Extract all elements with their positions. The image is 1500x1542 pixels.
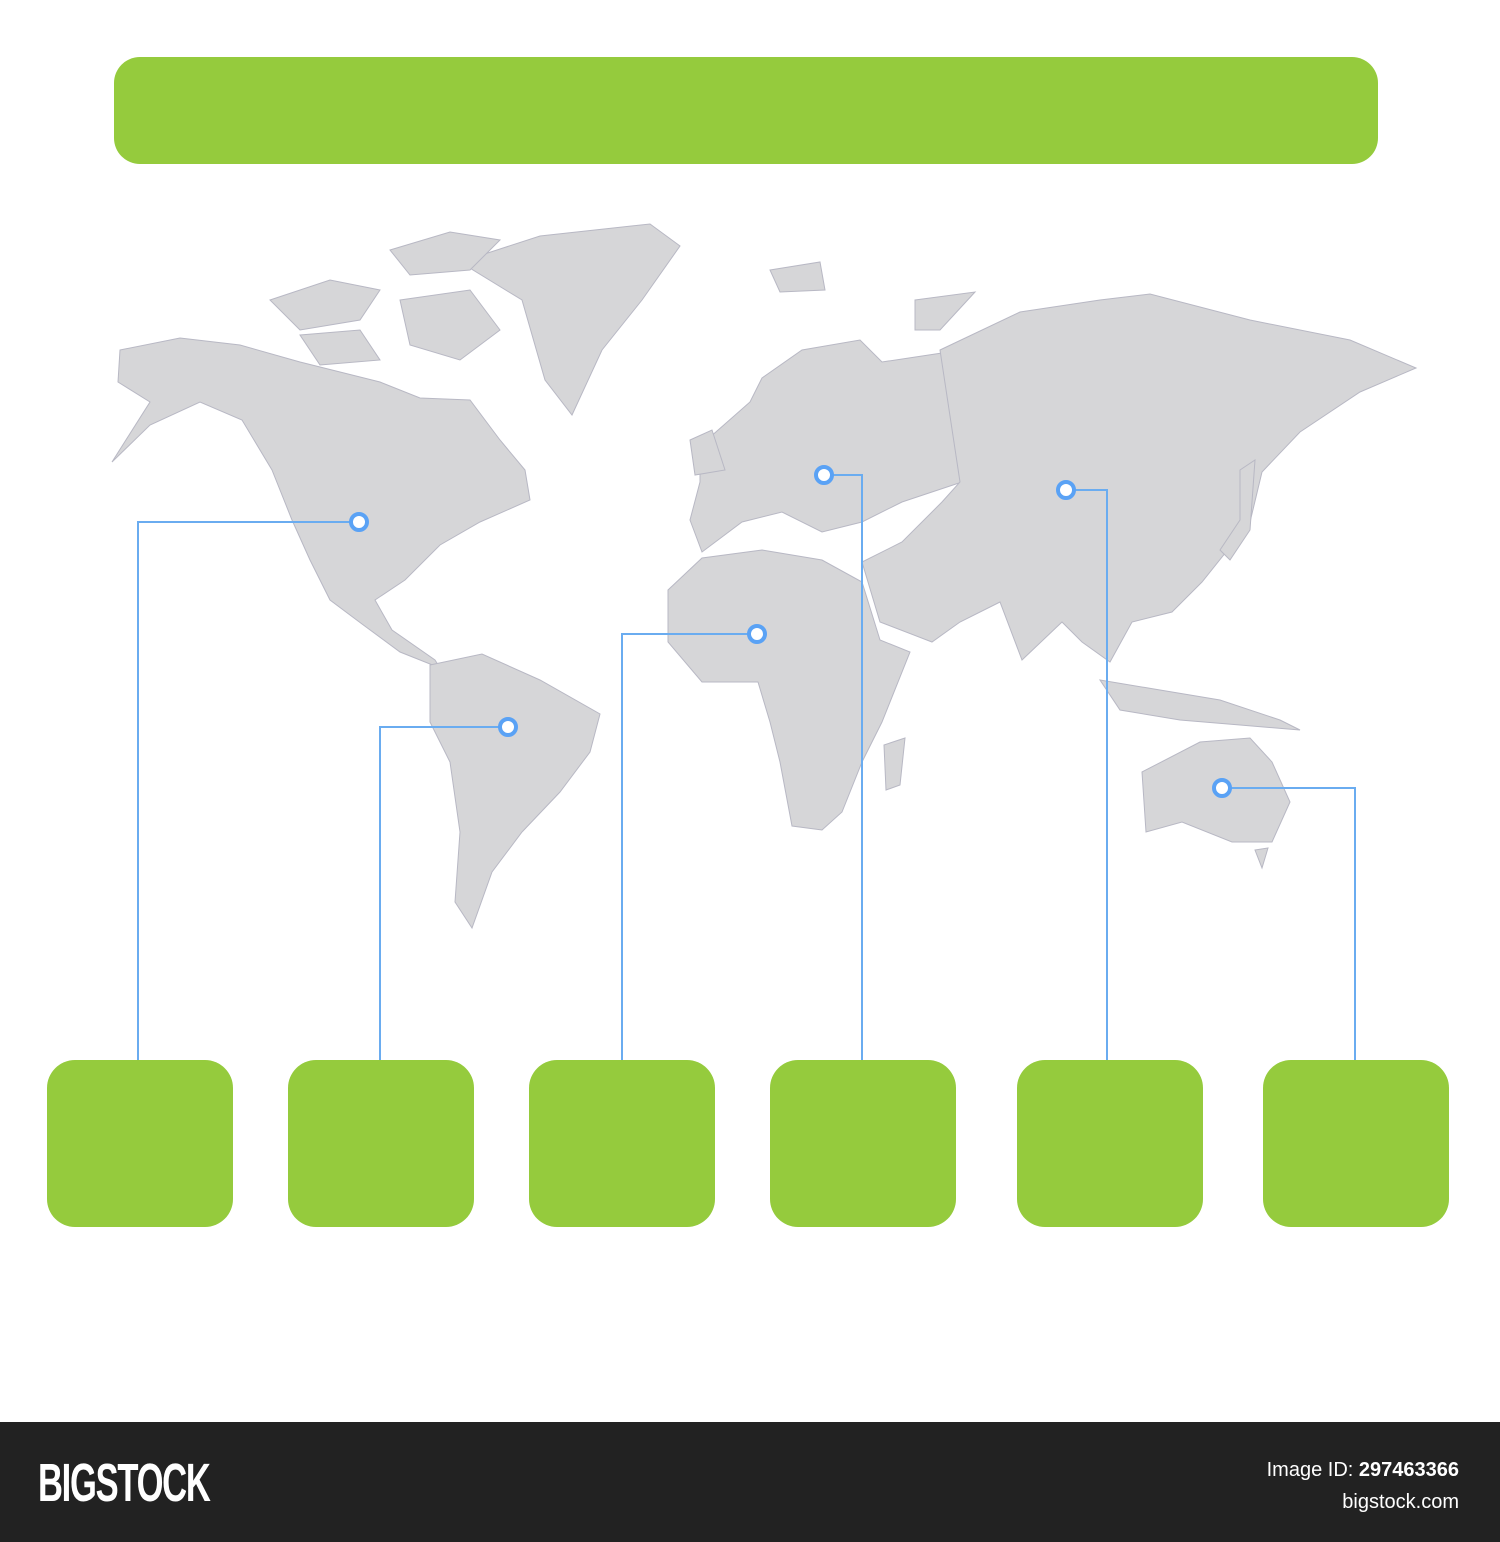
connector lines [138,475,1355,1060]
footer image id [1267,1459,1459,1513]
box 4 [770,1060,956,1227]
footer logo: BIGSTOCK [38,1453,210,1513]
box 5 [1017,1060,1203,1227]
location markers [351,467,1230,796]
box 3 [529,1060,715,1227]
title banner [114,57,1378,164]
footer image id: bigstock.com [1342,1491,1459,1513]
box 2 [288,1060,474,1227]
box 6 [1263,1060,1449,1227]
footer image id: Image ID: 297463366 [1267,1459,1459,1481]
footer [0,1422,1500,1542]
box 1 [47,1060,233,1227]
map continents [112,224,1416,928]
